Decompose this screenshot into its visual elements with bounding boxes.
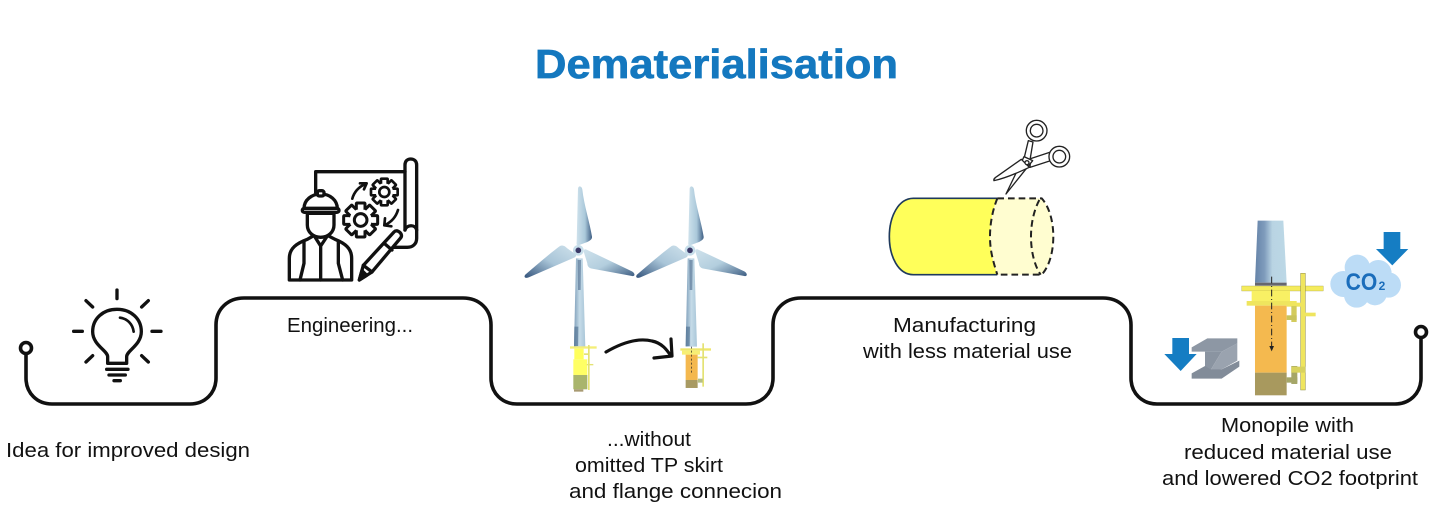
label: without bbox=[569, 429, 782, 503]
icon: wind turbine before bbox=[525, 186, 634, 392]
timeline path bbox=[20, 298, 1426, 404]
icon: CO2 cloud with down arrow bbox=[1330, 232, 1408, 308]
label: without: ...without bbox=[607, 429, 691, 451]
title: Dematerialisation bbox=[535, 41, 898, 87]
icon: scissors bbox=[994, 120, 1070, 194]
icon: wind turbine after bbox=[636, 186, 747, 388]
label: manufacturing: with less material use bbox=[862, 341, 1072, 363]
icon: CO2 cloud with down arrow: CO bbox=[1346, 269, 1377, 296]
old transition piece bbox=[570, 345, 597, 392]
icon: CO2 cloud with down arrow: 2 bbox=[1379, 279, 1386, 293]
label: monopile result: reduced material use bbox=[1184, 442, 1392, 464]
pen bbox=[359, 231, 402, 280]
label: monopile result bbox=[1162, 415, 1418, 490]
new monopile bbox=[680, 343, 711, 388]
label: idea: Idea for improved design bbox=[6, 440, 250, 462]
icon: steel beam with down arrow bbox=[1164, 338, 1239, 379]
arrow: down bbox=[1164, 338, 1197, 371]
label: monopile result: Monopile with bbox=[1221, 415, 1354, 437]
icon: light bulb bbox=[74, 290, 161, 381]
label: without: and flange connecion bbox=[569, 481, 782, 503]
icon: engineer with blueprint bbox=[289, 159, 417, 280]
label: without: omitted TP skirt bbox=[575, 455, 723, 477]
icon: monopile bbox=[1242, 221, 1323, 395]
person bbox=[289, 191, 352, 280]
arrow: transition between designs bbox=[606, 339, 672, 358]
label: manufacturing bbox=[862, 315, 1072, 363]
lower gear bbox=[344, 203, 378, 237]
label: engineering: Engineering... bbox=[287, 315, 413, 337]
icon: cylinder with cut section bbox=[889, 120, 1070, 275]
upper gear bbox=[371, 179, 398, 205]
label: manufacturing: Manufacturing bbox=[893, 315, 1036, 337]
arrow: down bbox=[1376, 232, 1408, 265]
label: monopile result: and lowered CO2 footprint bbox=[1162, 468, 1418, 490]
